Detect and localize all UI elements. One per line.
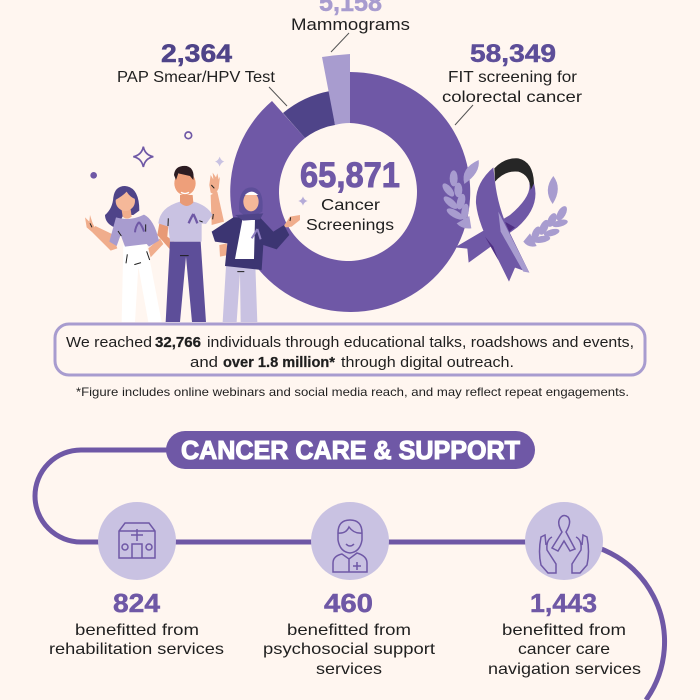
donut centre total — [300, 156, 400, 234]
callout box — [55, 324, 645, 375]
icon: doctor — [311, 502, 389, 580]
label: PAP smear — [117, 40, 276, 86]
stat: psychosocial: services — [316, 661, 382, 678]
segment: PAP smear — [283, 91, 335, 138]
label: FIT: colorectal cancer — [442, 89, 583, 106]
callout box: and — [190, 355, 218, 371]
label: FIT — [442, 40, 583, 106]
donut centre total: 65,871 — [300, 156, 400, 195]
stat: psychosocial: 460 — [324, 588, 373, 618]
donut chart — [230, 54, 470, 312]
stat: psychosocial — [263, 588, 436, 678]
stat: rehabilitation — [49, 588, 224, 658]
stat: navigation — [488, 588, 641, 678]
icon: hands with ribbon — [525, 502, 603, 580]
footnote: *Figure includes online webinars and social media reach, and may reflect repeat engagements. — [76, 385, 629, 399]
stat: navigation: navigation services — [488, 661, 641, 678]
callout box: We reached — [66, 335, 152, 351]
stat: rehabilitation: 824 — [113, 588, 161, 618]
donut centre total: Screenings — [306, 217, 394, 234]
stat: navigation: cancer care — [518, 641, 610, 658]
ribbon black loop — [494, 158, 534, 190]
stat: psychosocial: benefitted from — [287, 622, 411, 639]
ribbon left strand — [476, 167, 529, 282]
label: mammograms — [291, 0, 410, 34]
stat: navigation: 1,443 — [530, 588, 597, 618]
donut centre total: Cancer — [321, 197, 381, 214]
leaves — [440, 160, 569, 247]
segment: FIT screening — [230, 72, 470, 312]
label: FIT: 58,349 — [470, 40, 556, 68]
stat: navigation: benefitted from — [502, 622, 626, 639]
connector path — [35, 450, 665, 700]
illustration: awareness ribbon with leaves — [440, 158, 569, 282]
stat: psychosocial: psychosocial support — [263, 641, 436, 658]
person: man centre — [157, 166, 224, 322]
clothing fold marks — [90, 185, 291, 272]
illustration: three people — [85, 166, 300, 322]
stat: rehabilitation: benefitted from — [75, 622, 199, 639]
decorative sparkles — [90, 132, 308, 206]
leader lines — [269, 33, 473, 125]
section heading: CANCER CARE & SUPPORT — [181, 435, 520, 465]
segment: mammograms — [322, 54, 350, 125]
icon: hospital — [98, 502, 176, 580]
label: FIT: FIT screening for — [448, 69, 578, 86]
ribbon right strand and left tail — [455, 183, 535, 263]
person: woman hijab right — [212, 187, 300, 322]
label: PAP smear: PAP Smear/HPV Test — [117, 69, 276, 86]
callout box: individuals through educational talks, roadshows and events, — [207, 335, 634, 351]
person: woman left — [85, 186, 163, 322]
callout box: over 1.8 million* — [223, 355, 335, 371]
callout box: 32,766 — [155, 335, 201, 351]
label: mammograms: Mammograms — [291, 16, 410, 34]
label: PAP smear: 2,364 — [161, 40, 232, 68]
stat: rehabilitation: rehabilitation services — [49, 641, 224, 658]
callout box: through digital outreach. — [341, 355, 514, 371]
